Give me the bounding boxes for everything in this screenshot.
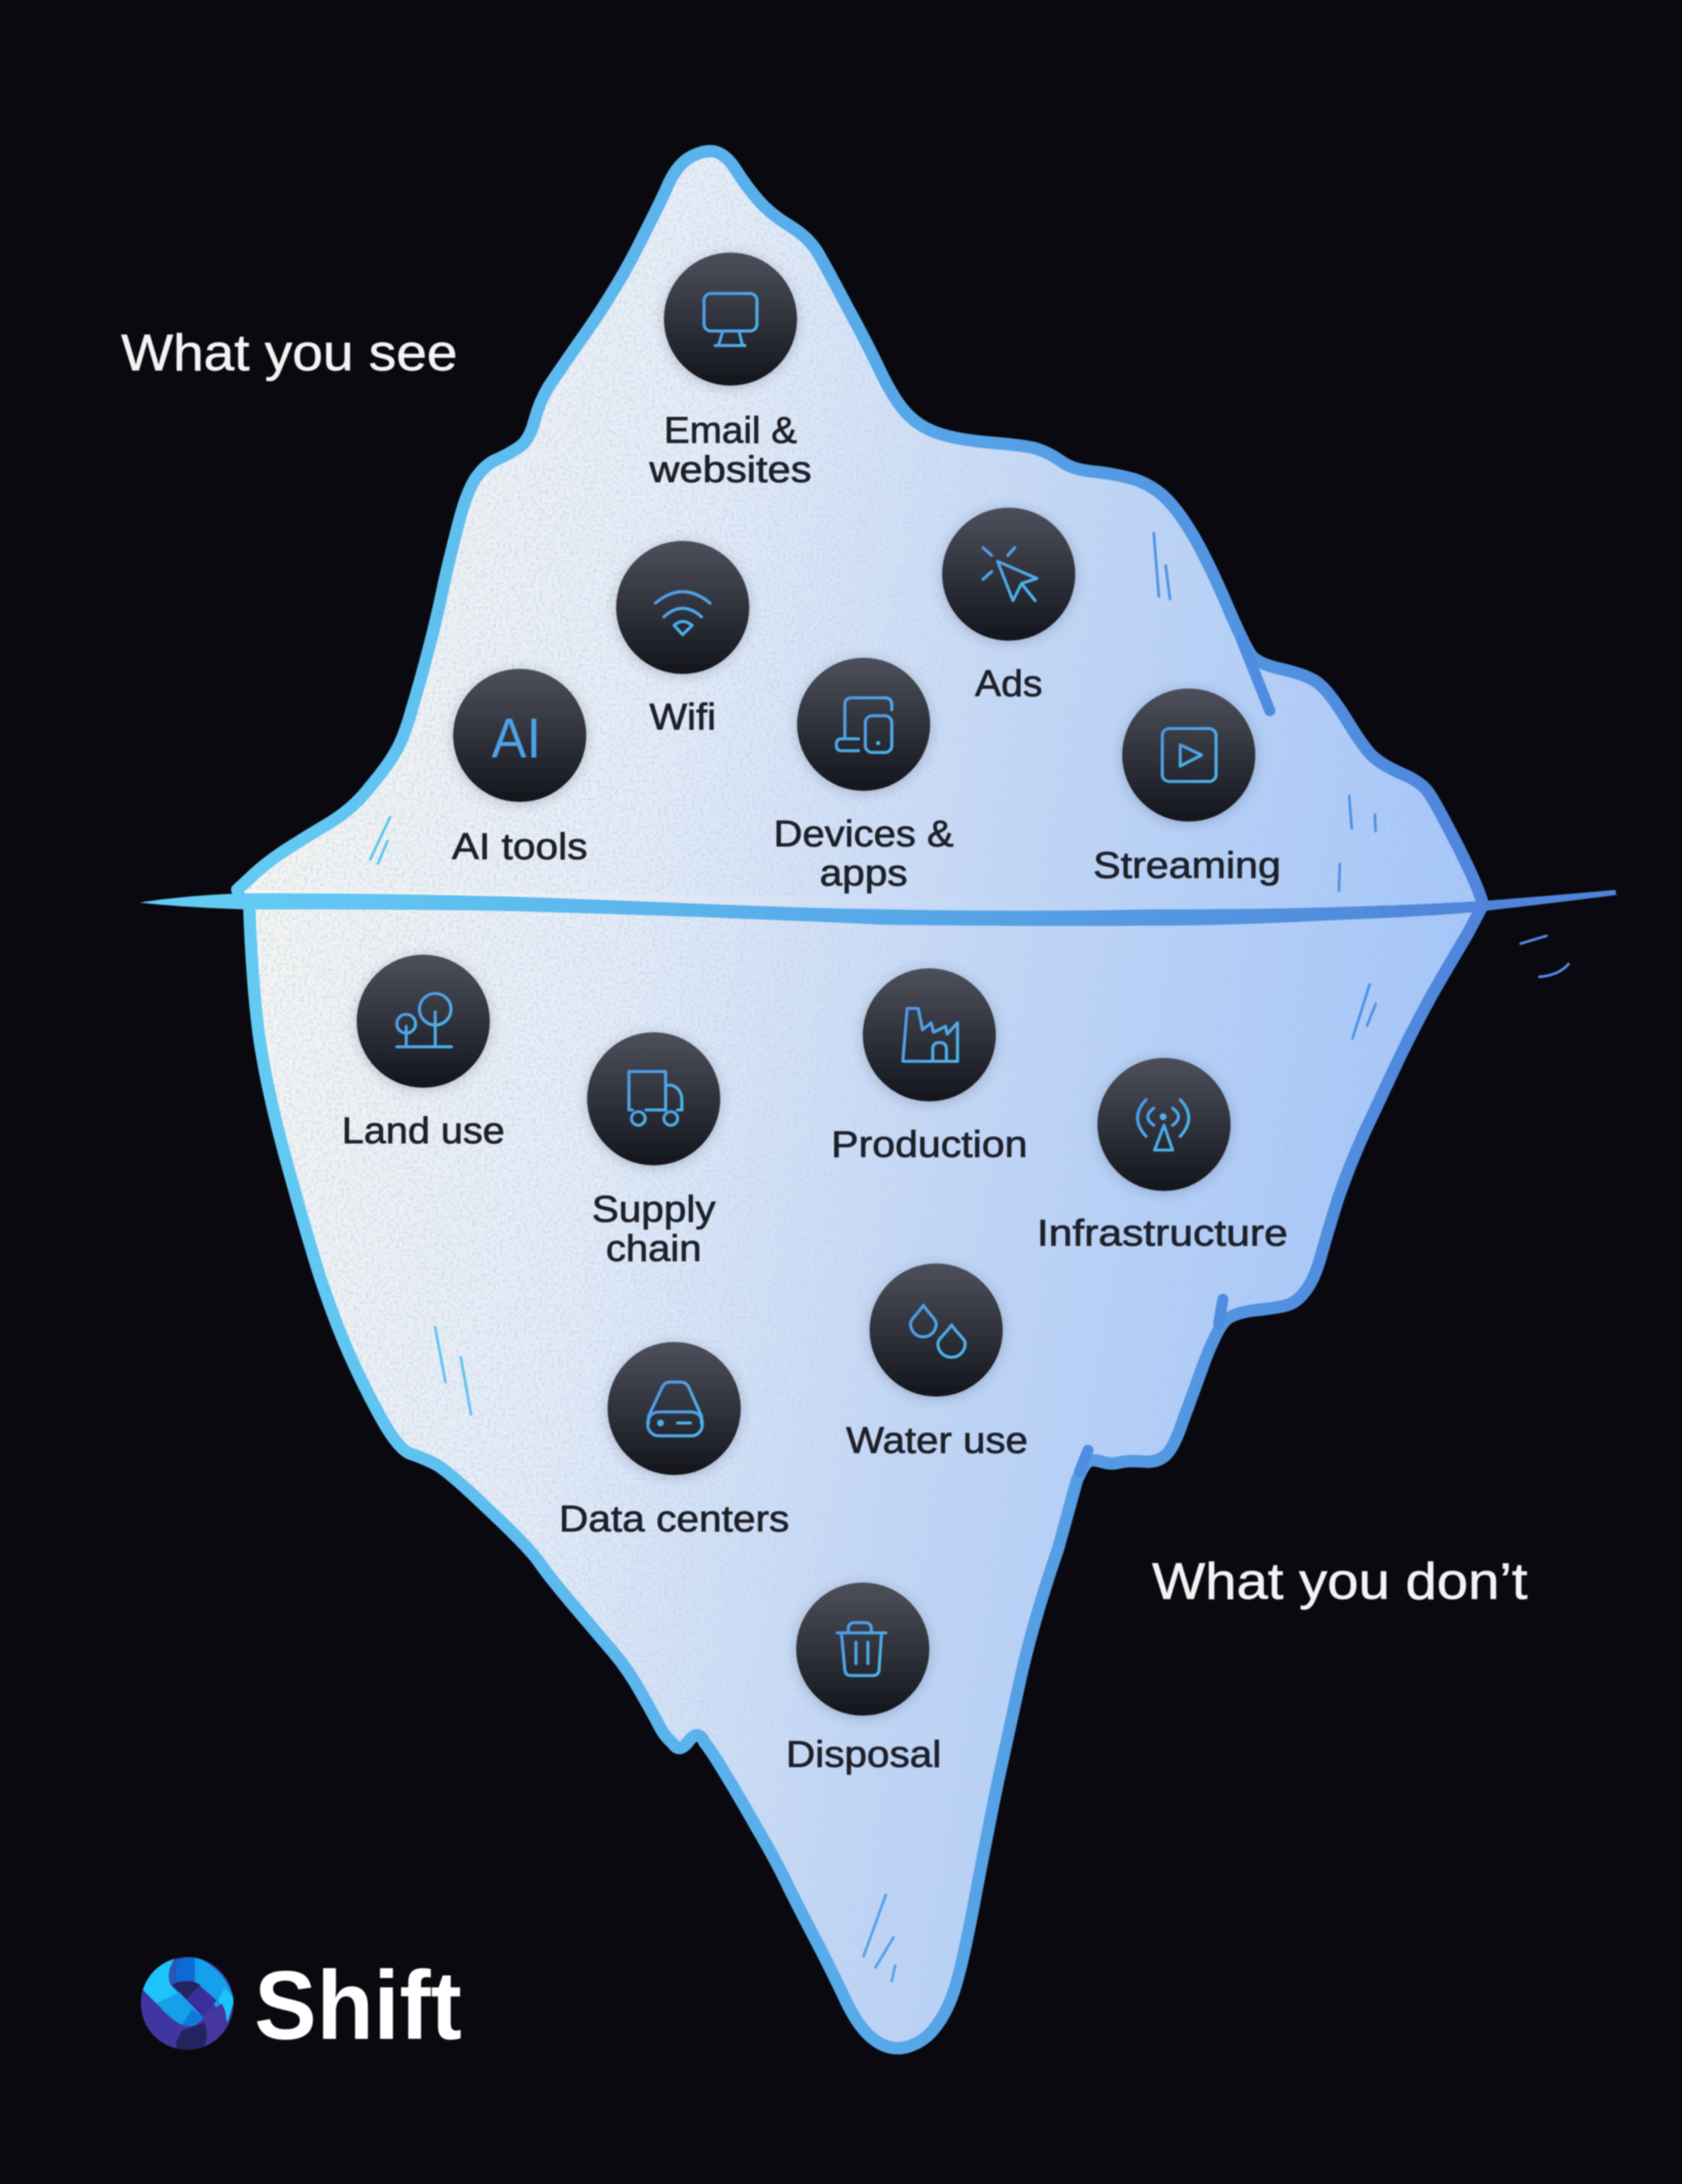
logo wordmark: Shift bbox=[254, 1952, 462, 2060]
label: supply chain: chain bbox=[606, 1228, 701, 1269]
label: email and websites: websites bbox=[649, 449, 812, 491]
iceberg body bbox=[237, 151, 1483, 2048]
item: ads bbox=[942, 508, 1075, 705]
label: devices and apps: Devices & bbox=[773, 813, 954, 855]
icon: wifi bbox=[616, 541, 749, 674]
icon: devices bbox=[797, 658, 930, 791]
label: email and websites: Email & bbox=[664, 410, 797, 451]
icon: antenna bbox=[1097, 1058, 1231, 1191]
item: land use bbox=[341, 955, 505, 1152]
logo: Shift bbox=[140, 1956, 462, 2051]
item: disposal bbox=[786, 1583, 941, 1775]
item: AI tools bbox=[452, 669, 587, 868]
icon: AI: AI bbox=[492, 706, 541, 770]
item: email and websites bbox=[649, 253, 812, 491]
icon: trees bbox=[357, 955, 490, 1088]
label: devices and apps: apps bbox=[819, 852, 908, 894]
icon: truck bbox=[587, 1032, 720, 1165]
label: land use: Land use bbox=[341, 1110, 505, 1152]
label: streaming: Streaming bbox=[1093, 845, 1281, 886]
logo mark bbox=[139, 1956, 236, 2053]
label: wifi: Wifi bbox=[649, 696, 716, 738]
item: supply chain bbox=[587, 1032, 720, 1269]
icon: hard drive bbox=[608, 1342, 741, 1475]
item: water use bbox=[847, 1263, 1027, 1461]
waterline bbox=[140, 890, 1616, 926]
label: production: Production bbox=[831, 1124, 1027, 1165]
icon: cursor click bbox=[942, 508, 1075, 641]
item: streaming bbox=[1093, 688, 1281, 886]
icon: trash can bbox=[796, 1583, 929, 1716]
item: data centers bbox=[559, 1342, 789, 1540]
label: infrastructure: Infrastructure bbox=[1037, 1212, 1288, 1254]
item: devices and apps bbox=[773, 658, 954, 894]
label: data centers: Data centers bbox=[559, 1498, 789, 1540]
label: water use: Water use bbox=[847, 1420, 1027, 1461]
icon: monitor bbox=[664, 253, 797, 386]
label: disposal: Disposal bbox=[786, 1734, 941, 1775]
item: infrastructure bbox=[1037, 1058, 1288, 1254]
item: production bbox=[831, 968, 1027, 1165]
iceberg illustration bbox=[140, 151, 1616, 2048]
label: AI tools: AI tools bbox=[452, 826, 587, 868]
heading: what you see: What you see bbox=[121, 324, 457, 381]
icon: water drops bbox=[870, 1263, 1003, 1397]
icon: factory bbox=[863, 968, 996, 1101]
icon: play bbox=[1122, 688, 1255, 822]
label: ads: Ads bbox=[975, 663, 1043, 705]
heading: what you don't: What you don’t bbox=[1152, 1553, 1528, 1610]
item: wifi bbox=[616, 541, 749, 738]
surface and crack marks bbox=[370, 533, 1569, 1981]
icon: AI bbox=[453, 669, 586, 802]
label: supply chain: Supply bbox=[592, 1188, 715, 1230]
